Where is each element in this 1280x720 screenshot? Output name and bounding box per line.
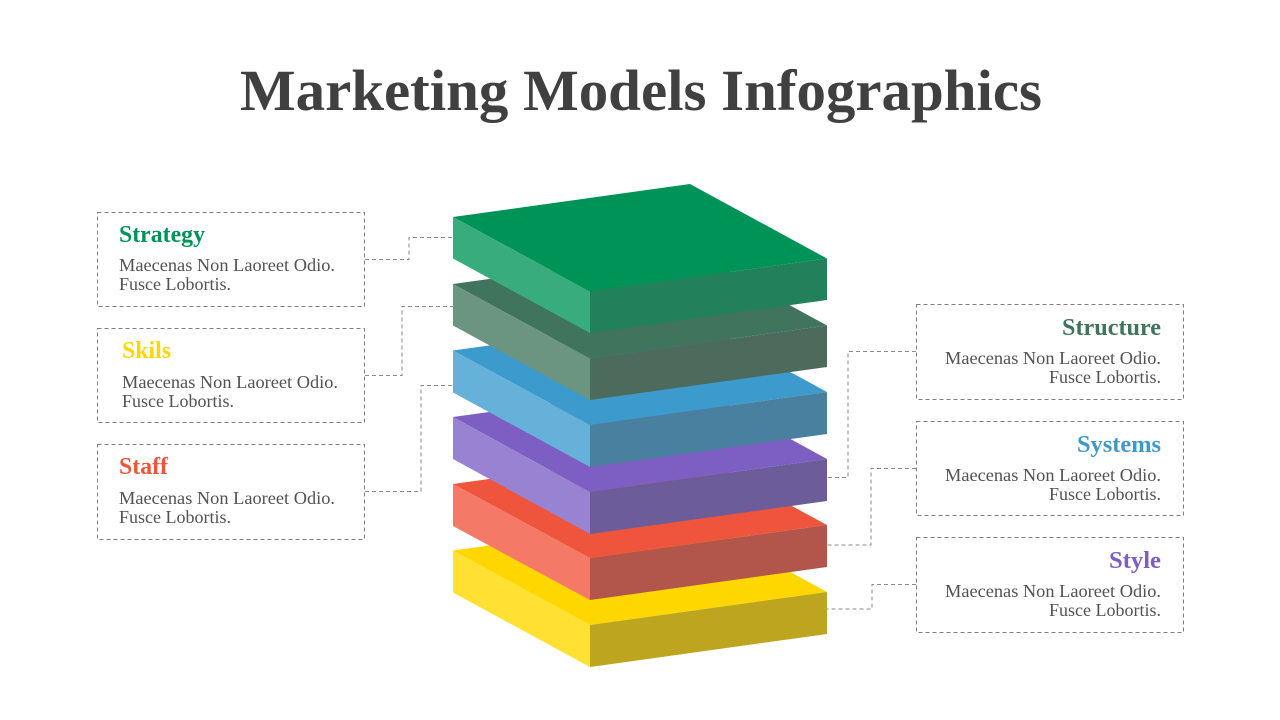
layer: dark green: [453, 251, 827, 400]
heading: Skils: Skils: [122, 338, 171, 364]
connector: Strategy: [365, 238, 453, 260]
panel: Strategy: [98, 212, 364, 306]
text: Skils body: Fusce Lobortis.: [122, 391, 234, 411]
text: Style body: Maecenas Non Laoreet Odio.: [945, 581, 1161, 601]
panel: Skils: [98, 328, 364, 422]
layer: blue: [453, 318, 827, 467]
layer: red: [453, 451, 827, 600]
layer: yellow: [453, 518, 827, 667]
text: Structure body: Fusce Lobortis.: [1049, 367, 1161, 387]
connector: Systems: [827, 468, 916, 545]
layer: green: [453, 184, 827, 333]
text: Skils body: [122, 372, 338, 411]
text: Staff body: [119, 488, 335, 527]
text: Skils body: Maecenas Non Laoreet Odio.: [122, 372, 338, 392]
text: Systems body: [945, 465, 1161, 504]
text: Strategy body: [119, 255, 335, 294]
layer: purple: [453, 384, 827, 534]
text: Systems body: Maecenas Non Laoreet Odio.: [945, 465, 1161, 485]
text: Structure body: Maecenas Non Laoreet Odio.: [945, 348, 1161, 368]
heading: Systems: Systems: [1077, 432, 1161, 458]
panel: Staff: [98, 444, 364, 540]
connector: Style: [827, 584, 916, 609]
panel: Style: [916, 538, 1184, 632]
panel: Structure: [916, 304, 1184, 400]
text: Staff body: Maecenas Non Laoreet Odio.: [119, 488, 335, 508]
heading: Strategy: Strategy: [119, 222, 205, 248]
heading: Staff: Staff: [119, 454, 169, 480]
panel: Systems: [916, 422, 1184, 516]
connector: Skils: [365, 306, 453, 376]
layered stack chart: [453, 184, 827, 667]
connector: Structure: [827, 352, 916, 478]
text: Style body: [945, 581, 1161, 620]
connector: Staff: [365, 386, 453, 492]
text: Strategy body: Maecenas Non Laoreet Odio.: [119, 255, 335, 275]
heading: Structure: Structure: [1062, 315, 1161, 341]
text: Systems body: Fusce Lobortis.: [1049, 484, 1161, 504]
text: Structure body: [945, 348, 1161, 387]
text: Strategy body: Fusce Lobortis.: [119, 274, 231, 294]
text: Staff body: Fusce Lobortis.: [119, 507, 231, 527]
title: Marketing Models Infographics: [240, 58, 1042, 123]
text: Style body: Fusce Lobortis.: [1049, 600, 1161, 620]
heading: Style: Style: [1109, 548, 1161, 574]
